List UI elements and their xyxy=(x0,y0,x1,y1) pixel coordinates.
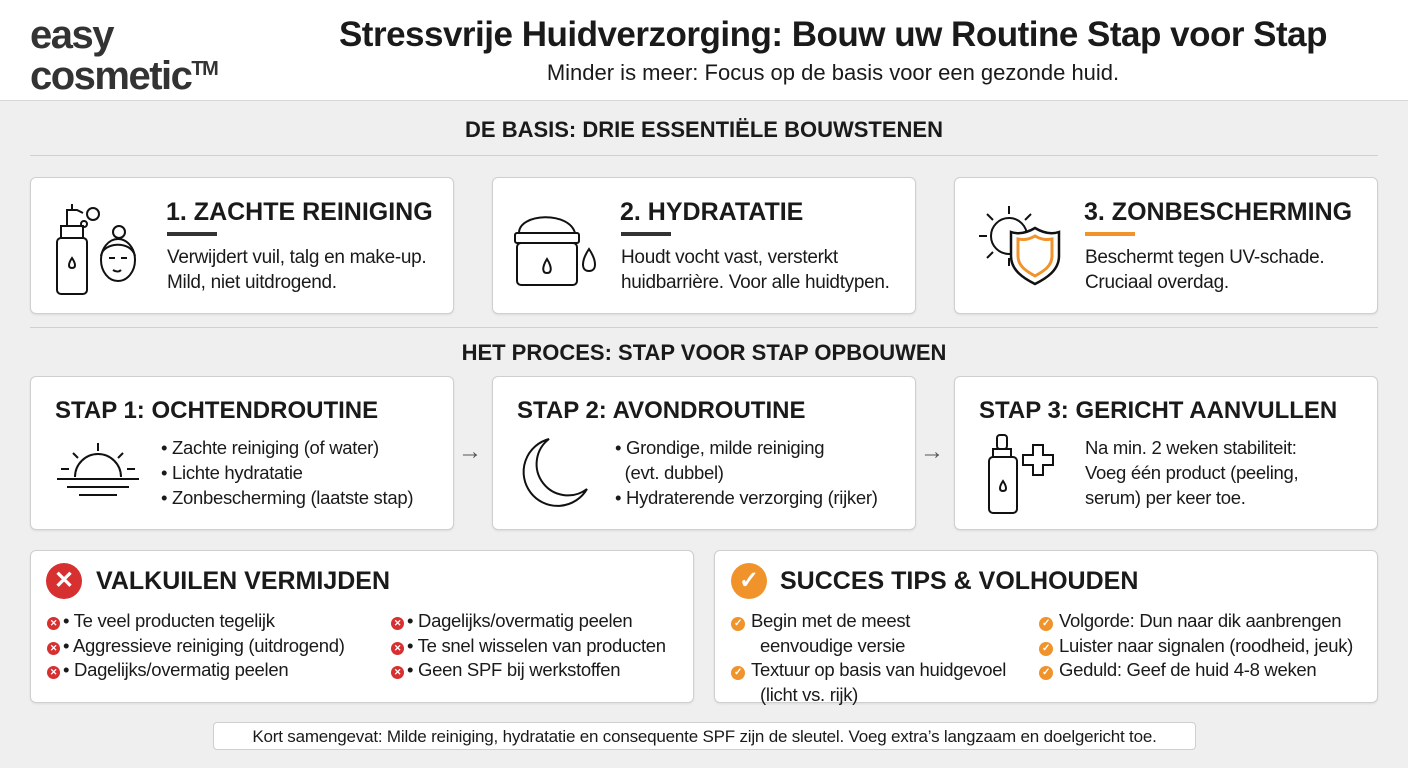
card: stap 1 xyxy=(30,376,454,530)
list left: ✕ xyxy=(50,642,57,652)
text: serum) per keer toe. xyxy=(1085,487,1246,508)
list xyxy=(615,437,878,508)
heading: VALKUILEN VERMIJDEN xyxy=(96,567,390,595)
list right: • Te snel wisselen van producten xyxy=(407,634,666,656)
heading: STAP 1: OCHTENDROUTINE xyxy=(55,397,378,424)
text xyxy=(1085,247,1324,293)
text: Houdt vocht vast, versterkt xyxy=(621,247,838,268)
text: Cruciaal overdag. xyxy=(1085,272,1229,293)
icon: red x: ✕ xyxy=(54,567,74,594)
panel: succes tips xyxy=(714,550,1378,703)
list right xyxy=(1039,610,1353,680)
list: • Grondige, milde reiniging xyxy=(615,437,824,458)
panel: valkuilen xyxy=(30,550,694,703)
list right: • Geen SPF bij werkstoffen xyxy=(407,659,620,680)
icon: dropper plus xyxy=(988,434,1054,514)
list left: • Aggressieve reiniging (uitdrogend) xyxy=(63,634,345,656)
list left: • Te veel producten tegelijk xyxy=(63,610,275,631)
card: zonbescherming xyxy=(954,177,1378,314)
card: stap 3 xyxy=(954,376,1378,530)
logo: easy xyxy=(30,13,113,57)
arrow: → xyxy=(920,438,944,465)
list left: ✕ xyxy=(50,667,57,677)
text: Verwijdert vuil, talg en make-up. xyxy=(167,247,426,268)
list right: Volgorde: Dun naar dik aanbrengen xyxy=(1059,610,1341,631)
card: hydratatie xyxy=(492,177,916,314)
icon: sunrise xyxy=(57,443,139,496)
list right: • Dagelijks/overmatig peelen xyxy=(407,610,632,631)
list left: (licht vs. rijk) xyxy=(760,684,858,704)
list left: ✓ xyxy=(734,618,742,629)
text: Voeg één product (peeling, xyxy=(1085,462,1298,483)
heading: STAP 2: AVONDROUTINE xyxy=(517,397,805,424)
subtitle: Minder is meer: Focus op de basis voor een gezonde huid. xyxy=(547,60,1119,85)
arrow: → xyxy=(458,438,482,465)
heading: STAP 3: GERICHT AANVULLEN xyxy=(979,397,1337,424)
card: stap 2 xyxy=(492,376,916,530)
heading: SUCCES TIPS & VOLHOUDEN xyxy=(780,567,1138,595)
heading: 1. ZACHTE REINIGING xyxy=(166,198,433,226)
icon: red x xyxy=(46,563,82,599)
title: Stressvrije Huidverzorging: Bouw uw Routine Stap voor Stap xyxy=(339,15,1327,54)
text: Mild, niet uitdrogend. xyxy=(167,272,337,293)
list right: ✕ xyxy=(394,667,401,677)
heading: 3. ZONBESCHERMING xyxy=(1084,198,1352,226)
icon: moon xyxy=(522,438,588,507)
list right: ✕ xyxy=(394,618,401,628)
icon: orange check: ✓ xyxy=(739,567,759,594)
list left: Textuur op basis van huidgevoel xyxy=(751,659,1006,680)
list left: eenvoudige versie xyxy=(760,634,905,656)
list right xyxy=(391,610,666,680)
icon: cream jar xyxy=(514,216,596,286)
list: • Lichte hydratatie xyxy=(161,462,303,483)
text: Na min. 2 weken stabiliteit: xyxy=(1085,437,1297,458)
list: • Hydraterende verzorging (rijker) xyxy=(615,487,878,508)
icon: bottle and face xyxy=(56,204,136,295)
text xyxy=(167,247,426,293)
list left: ✓ xyxy=(734,667,742,678)
list left xyxy=(47,610,345,680)
list: • Zachte reiniging (of water) xyxy=(161,437,379,458)
logo xyxy=(30,13,218,98)
list right: ✓ xyxy=(1042,642,1050,654)
list xyxy=(161,437,413,508)
list: (evt. dubbel) xyxy=(625,462,724,483)
text xyxy=(1085,437,1298,508)
list right: ✕ xyxy=(394,642,401,652)
text: huidbarrière. Voor alle huidtypen. xyxy=(621,272,890,293)
text: Beschermt tegen UV-schade. xyxy=(1085,247,1324,268)
card: reiniging xyxy=(30,177,454,314)
list left: • Dagelijks/overmatig peelen xyxy=(63,659,288,680)
icon: sun shield xyxy=(979,206,1060,286)
list left: Begin met de meest xyxy=(751,610,910,631)
logo: cosmeticTM xyxy=(30,54,217,98)
list right: ✓ xyxy=(1042,667,1050,678)
footer summary xyxy=(213,722,1196,750)
list right: ✓ xyxy=(1042,618,1050,629)
header band xyxy=(0,0,1408,101)
footer summary: Kort samengevat: Milde reiniging, hydratatie en consequente SPF zijn de sleutel. Voeg extra’s langzaam en doelgericht toe. xyxy=(252,727,1157,746)
list left xyxy=(731,610,1006,705)
section heading: proces: HET PROCES: STAP VOOR STAP OPBOUWEN xyxy=(462,340,946,365)
list right: Luister naar signalen (roodheid, jeuk) xyxy=(1059,634,1353,656)
list: • Zonbescherming (laatste stap) xyxy=(161,487,413,508)
heading: 2. HYDRATATIE xyxy=(620,198,803,226)
list right: Geduld: Geef de huid 4-8 weken xyxy=(1059,659,1316,680)
section heading: basis: DE BASIS: DRIE ESSENTIËLE BOUWSTENEN xyxy=(465,117,943,142)
text xyxy=(621,247,890,293)
list left: ✕ xyxy=(50,618,57,628)
icon: orange check xyxy=(731,563,767,599)
